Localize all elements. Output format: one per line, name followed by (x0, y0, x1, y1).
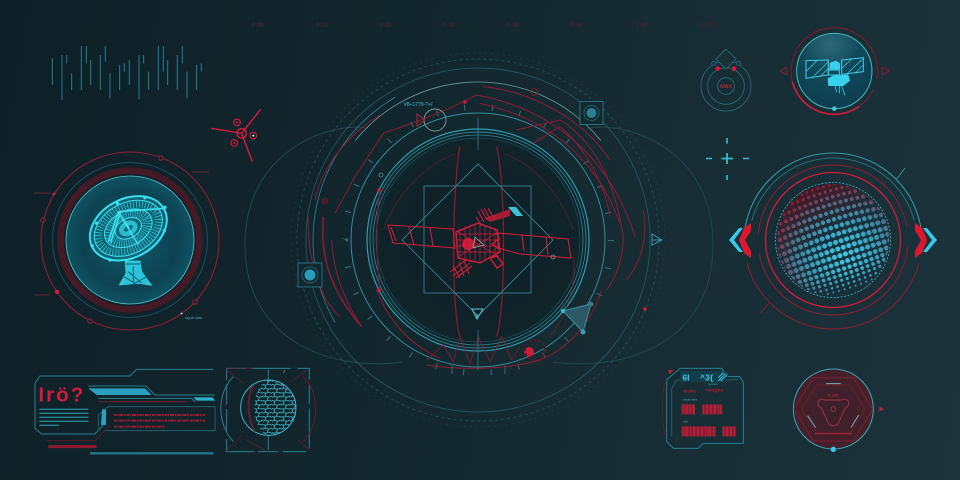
icon: wireframe radar dish (79, 183, 178, 285)
panel frame (35, 369, 213, 434)
barcodes (682, 409, 736, 431)
red blip (524, 340, 545, 360)
panel: hexagon gauge (793, 369, 884, 452)
gray triangle marker (561, 302, 594, 334)
right chevrons (915, 223, 937, 258)
cyan tabs (88, 388, 152, 395)
cyan disk (66, 176, 194, 304)
dark core (366, 128, 590, 352)
top scale labels: 0·70 (701, 23, 714, 29)
targeting square (424, 186, 531, 293)
icon: satellite (806, 58, 863, 95)
panel: satellite gauge (774, 11, 895, 131)
icon: satellite wireframe (388, 208, 571, 278)
panel: mesh globe (221, 368, 316, 452)
satellite solar wing tag (508, 207, 523, 216)
panel: central targeting scope (245, 15, 713, 465)
panel: barcode card (662, 368, 743, 448)
tri-lobe emblem (818, 399, 849, 426)
teal main rings (253, 15, 703, 465)
dashed ring (776, 182, 890, 298)
targeting diamond (402, 164, 553, 316)
barcode signal lines (52, 46, 201, 100)
red data text (114, 415, 205, 427)
panel: barcode card: system (708, 382, 718, 386)
square marker: top right (580, 102, 603, 124)
panel: data readout (35, 369, 215, 453)
frame (227, 368, 309, 452)
teal lines (39, 409, 88, 425)
triangle marker: right (652, 234, 662, 245)
top scale labels: 0·40 (507, 23, 520, 29)
red orbit arcs (308, 87, 645, 368)
top scale labels: 0·00 (252, 23, 265, 29)
sphere base (777, 184, 889, 296)
top scale labels: 0·10 (316, 23, 329, 29)
target reticle icon: MAX (720, 84, 732, 90)
frame (667, 368, 743, 448)
scope caption: #8+17?9·?+/ (404, 102, 433, 108)
teal top arcs (730, 139, 936, 345)
small caption: signal data (185, 316, 202, 320)
side orbit ellipses (245, 127, 713, 364)
pointer triangle (472, 309, 483, 319)
top scale labels: 0·20 (380, 23, 393, 29)
panel: barcode card: parameter (683, 397, 697, 401)
red rings (774, 11, 895, 131)
top scale labels: 0·50 (571, 23, 584, 29)
outer dashed rings (291, 53, 665, 427)
panel: barcode card: 6I (682, 373, 690, 383)
crosshair icon (706, 138, 749, 180)
red labels: wuba (682, 388, 696, 394)
top scale labels: 0·30 (443, 23, 456, 29)
outer red ring (41, 152, 219, 330)
red rings (724, 131, 942, 349)
panel: radar dish gauge (34, 152, 219, 330)
panel: barcode card: ^3{ (700, 373, 714, 383)
cyan header glyphs (680, 371, 727, 382)
target reticle icon (701, 49, 751, 111)
readout glyphs: Irö? (38, 384, 85, 407)
small ring markers (322, 88, 647, 311)
teal spokes (452, 118, 505, 374)
halftone sphere (777, 184, 889, 296)
square marker: left (298, 263, 322, 287)
panel: halftone sphere gauge (729, 152, 937, 330)
top scale labels (252, 23, 714, 29)
side arrows (780, 67, 889, 75)
panel: barcode card: info (683, 419, 688, 423)
hexagons (794, 378, 873, 441)
top scale labels: 0·60 (636, 23, 649, 29)
text box (98, 407, 215, 431)
globe (241, 380, 296, 435)
left chevrons (729, 223, 751, 258)
panel: barcode card: wmgba (705, 388, 723, 394)
tick ring (345, 107, 611, 373)
satellite core marker (473, 237, 484, 248)
panel: hexagon gauge: ALERT (828, 393, 839, 397)
bottom bars (47, 425, 110, 441)
icon: red three-arm node (211, 109, 261, 162)
label ticks (34, 172, 209, 295)
marker dots (831, 447, 836, 452)
